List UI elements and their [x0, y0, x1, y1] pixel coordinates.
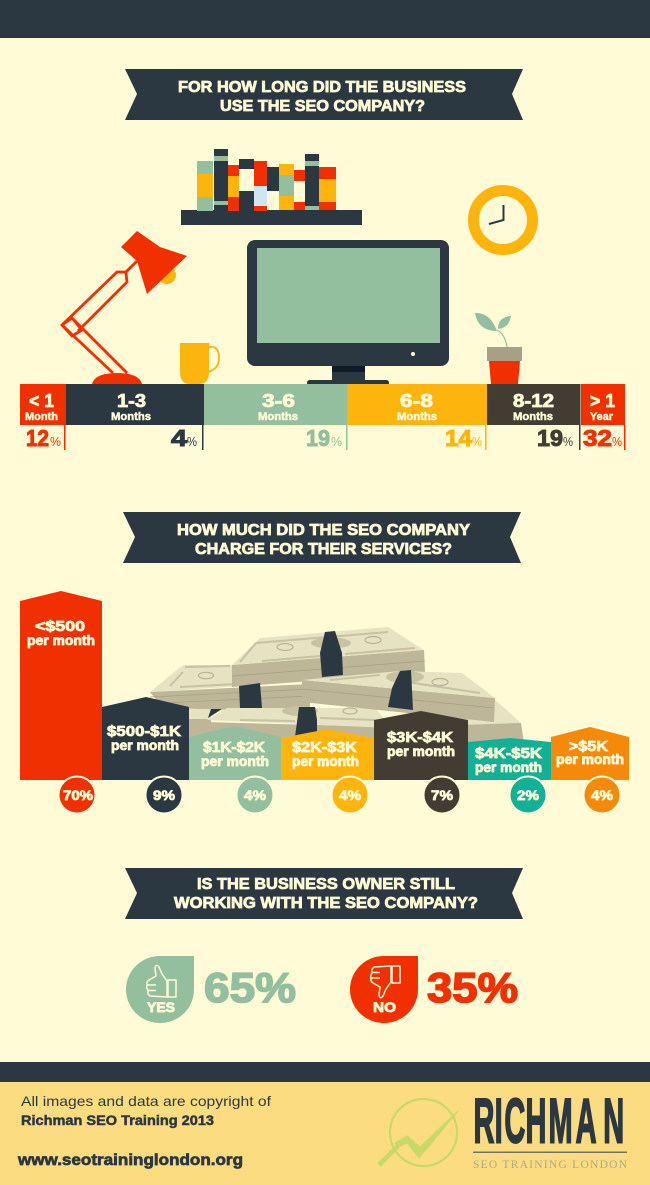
heading: how long: USE THE SEO COMPANY?: [220, 98, 425, 115]
segment: 1-3 months: 4: [171, 425, 187, 451]
segment: 8-12 months: [487, 384, 580, 451]
icon: computer monitor: [247, 240, 449, 384]
heading: still working: WORKING WITH THE SEO COMPANY?: [174, 895, 478, 912]
segment: 6-8 months: [347, 384, 487, 451]
segment: 8-12 months: %: [563, 434, 573, 449]
bar: $1K-$2K: [189, 726, 281, 780]
segment: 3-6 months: 3-6: [262, 391, 295, 411]
bar: $500-$1K: $500-$1K: [107, 723, 181, 740]
badge: 4%: [332, 776, 368, 814]
no answer: NO: [373, 999, 396, 1015]
badge: 9%: [146, 776, 182, 814]
segment: 1-3 months: Months: [111, 411, 151, 423]
back sheet under left stack: [189, 709, 211, 719]
icon: thumbs up: [147, 965, 176, 997]
icon: clock: [474, 190, 532, 250]
heading: still working: IS THE BUSINESS OWNER STILL: [197, 876, 455, 893]
badge: 9%: 9%: [153, 787, 176, 803]
heading: how long: FOR HOW LONG DID THE BUSINESS: [178, 79, 466, 96]
bar: $3K-$4K: per month: [387, 744, 455, 759]
copyright text: [21, 1093, 271, 1128]
stat: 65%: 65%: [204, 964, 296, 1011]
bar: under $500: <$500: [35, 618, 85, 635]
segment: 8-12 months: Months: [513, 411, 553, 423]
bar: $2K-$3K: [281, 729, 374, 780]
badge: 4%: 4%: [591, 787, 614, 803]
segment: 6-8 months: %: [472, 434, 482, 449]
segment: more than 1 year: Year: [590, 411, 614, 423]
badge: 4%: [584, 776, 620, 814]
logo wordmark: RICHMAN: [474, 1087, 624, 1157]
website url: www.seotraininglondon.org: [17, 1152, 243, 1169]
left stack: [150, 684, 310, 712]
segment: less than 1 month: Month: [25, 411, 58, 423]
badge: 2%: [510, 776, 546, 814]
segment: 3-6 months: Months: [258, 411, 298, 423]
bar: $3K-$4K: [374, 711, 468, 780]
heading: how much: HOW MUCH DID THE SEO COMPANY: [177, 522, 470, 539]
bar: $1K-$2K: per month: [201, 754, 269, 769]
segment: 6-8 months: Months: [397, 411, 437, 423]
icon: potted plant: [475, 313, 522, 384]
segment: 6-8 months: 6-8: [400, 391, 433, 411]
percentage badges: [58, 776, 620, 814]
bar: $4K-$5K: per month: [475, 760, 542, 775]
segment: 3-6 months: [204, 384, 348, 451]
segment: 6-8 months: 14: [445, 425, 472, 451]
segment: 1-3 months: 1-3: [117, 391, 146, 411]
stat: 35%: 35%: [427, 964, 518, 1011]
badge: 70%: 70%: [63, 787, 94, 803]
segment: 3-6 months: %: [331, 434, 342, 449]
copyright text: All images and data are copyright of: [21, 1093, 271, 1109]
segment: more than 1 year: 32: [583, 425, 612, 451]
badge: 7%: 7%: [431, 787, 454, 803]
segment: less than 1 month: %: [50, 434, 61, 449]
bar: $500-$1K: per month: [111, 738, 179, 753]
lower right stack: [440, 698, 521, 727]
bar: $500-$1K: [102, 697, 189, 780]
bar: under $500: per month: [27, 633, 95, 648]
segment: 1-3 months: %: [187, 434, 197, 449]
bar: over $5K: >$5K: [569, 738, 608, 755]
segment: more than 1 year: %: [612, 434, 622, 449]
segment: more than 1 year: > 1: [590, 391, 615, 411]
bar: under $500: [20, 591, 102, 780]
footer panel: [0, 1082, 650, 1185]
top bar: [0, 0, 650, 38]
segment: 3-6 months: 19: [306, 425, 330, 451]
segment: less than 1 month: < 1: [29, 391, 54, 411]
top stack: [232, 650, 425, 687]
logo wordmark: SEO TRAINING LONDON: [473, 1159, 628, 1171]
badge: 2%: 2%: [517, 787, 540, 803]
icon: thumbs down: [371, 966, 400, 998]
badge: 4%: 4%: [244, 787, 267, 803]
chart: duration bar: [20, 384, 626, 451]
badge: 4%: [236, 776, 274, 814]
money bands: [320, 631, 343, 677]
middle stack: [302, 680, 495, 722]
bar: $1K-$2K: $1K-$2K: [203, 739, 265, 756]
segment: less than 1 month: [20, 384, 66, 451]
segment: 1-3 months: [66, 384, 204, 451]
bar: $2K-$3K: per month: [292, 754, 359, 769]
heading: how much: CHARGE FOR THEIR SERVICES?: [195, 541, 452, 558]
bar: $3K-$4K: $3K-$4K: [387, 729, 453, 746]
icon: desk lamp: [62, 231, 187, 384]
badge: 4%: 4%: [339, 787, 362, 803]
yes answer: [126, 956, 296, 1023]
heading: how long: [125, 69, 523, 120]
badge: 7%: [424, 776, 460, 814]
yes answer: YES: [147, 999, 175, 1015]
bar: $2K-$3K: $2K-$3K: [292, 739, 357, 756]
badge: 70%: [58, 776, 96, 814]
bar: over $5K: [551, 727, 629, 780]
no answer: [350, 956, 518, 1023]
logo mark: [379, 1099, 458, 1166]
segment: 8-12 months: 8-12: [513, 391, 554, 411]
illustration: pile of money: [150, 627, 525, 750]
heading: still working: [125, 868, 523, 919]
segment: 8-12 months: 19: [537, 425, 563, 451]
bar: $4K-$5K: $4K-$5K: [475, 745, 542, 762]
icon: bookshelf: [181, 149, 362, 225]
segment: less than 1 month: 12: [26, 425, 49, 451]
bar: $4K-$5K: [468, 738, 551, 780]
footer band: [0, 1062, 650, 1082]
chart: monthly charge bars: [20, 591, 629, 780]
segment: more than 1 year: [581, 384, 626, 451]
bar: over $5K: per month: [556, 752, 624, 767]
bottom stack: [205, 722, 392, 745]
heading: how much: [123, 512, 521, 563]
copyright text: Richman SEO Training 2013: [21, 1112, 214, 1128]
icon: coffee mug: [180, 343, 219, 384]
